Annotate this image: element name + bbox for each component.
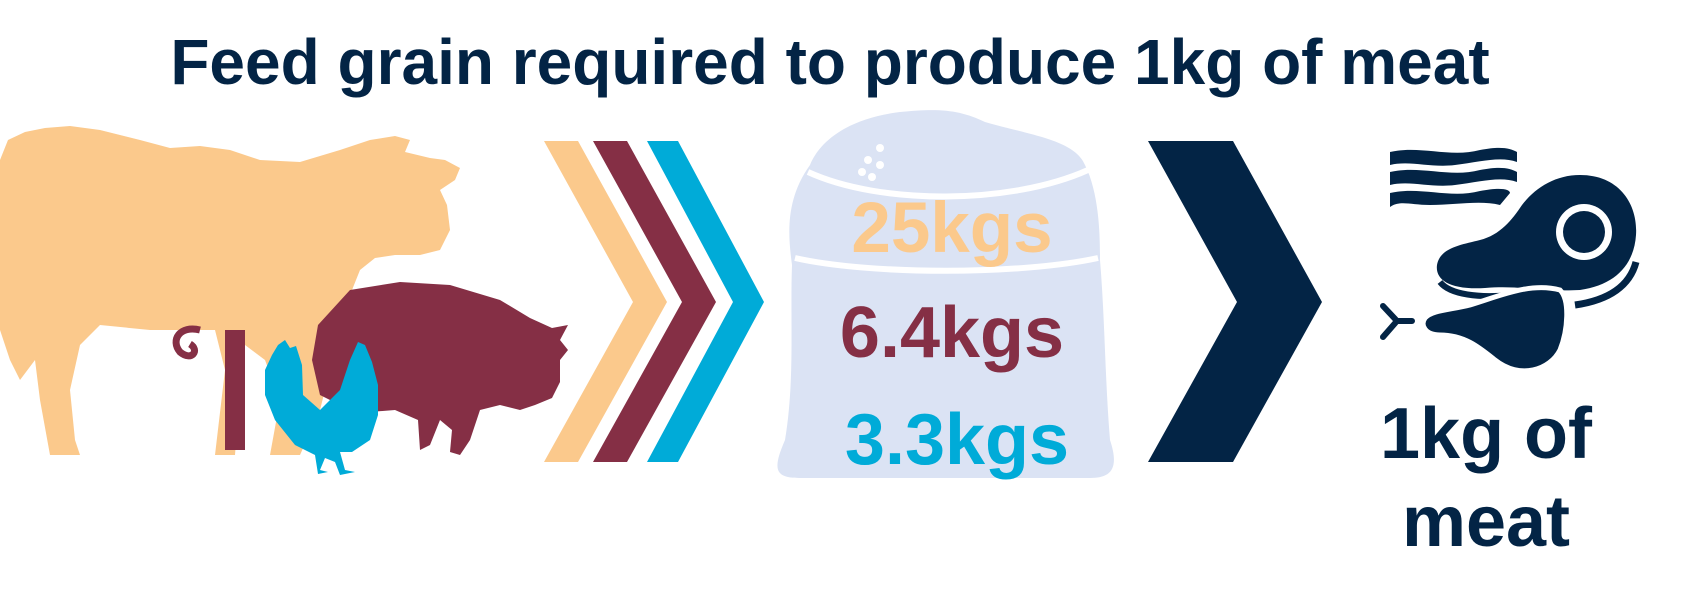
text: 1kg of meat: meat	[1402, 482, 1570, 562]
icon: cow	[0, 126, 460, 455]
title: Feed grain required to produce 1kg of meat	[170, 26, 1490, 98]
icon: meat	[1383, 148, 1636, 371]
arrow: chevron tan	[544, 141, 667, 462]
arrow: dark chevron	[1148, 141, 1322, 462]
icon: chicken	[265, 340, 378, 475]
text: 25kgs: 25kgs	[851, 189, 1053, 268]
text: 3.3kgs: 3.3kgs	[845, 400, 1069, 480]
text: 1kg of meat: 1kg of	[1380, 394, 1593, 474]
icon: grain sack	[777, 110, 1114, 478]
text: 6.4kgs: 6.4kgs	[840, 293, 1064, 373]
icon: pig	[176, 282, 568, 455]
arrow: chevron blue	[647, 141, 764, 462]
arrow: chevron maroon	[593, 141, 716, 462]
